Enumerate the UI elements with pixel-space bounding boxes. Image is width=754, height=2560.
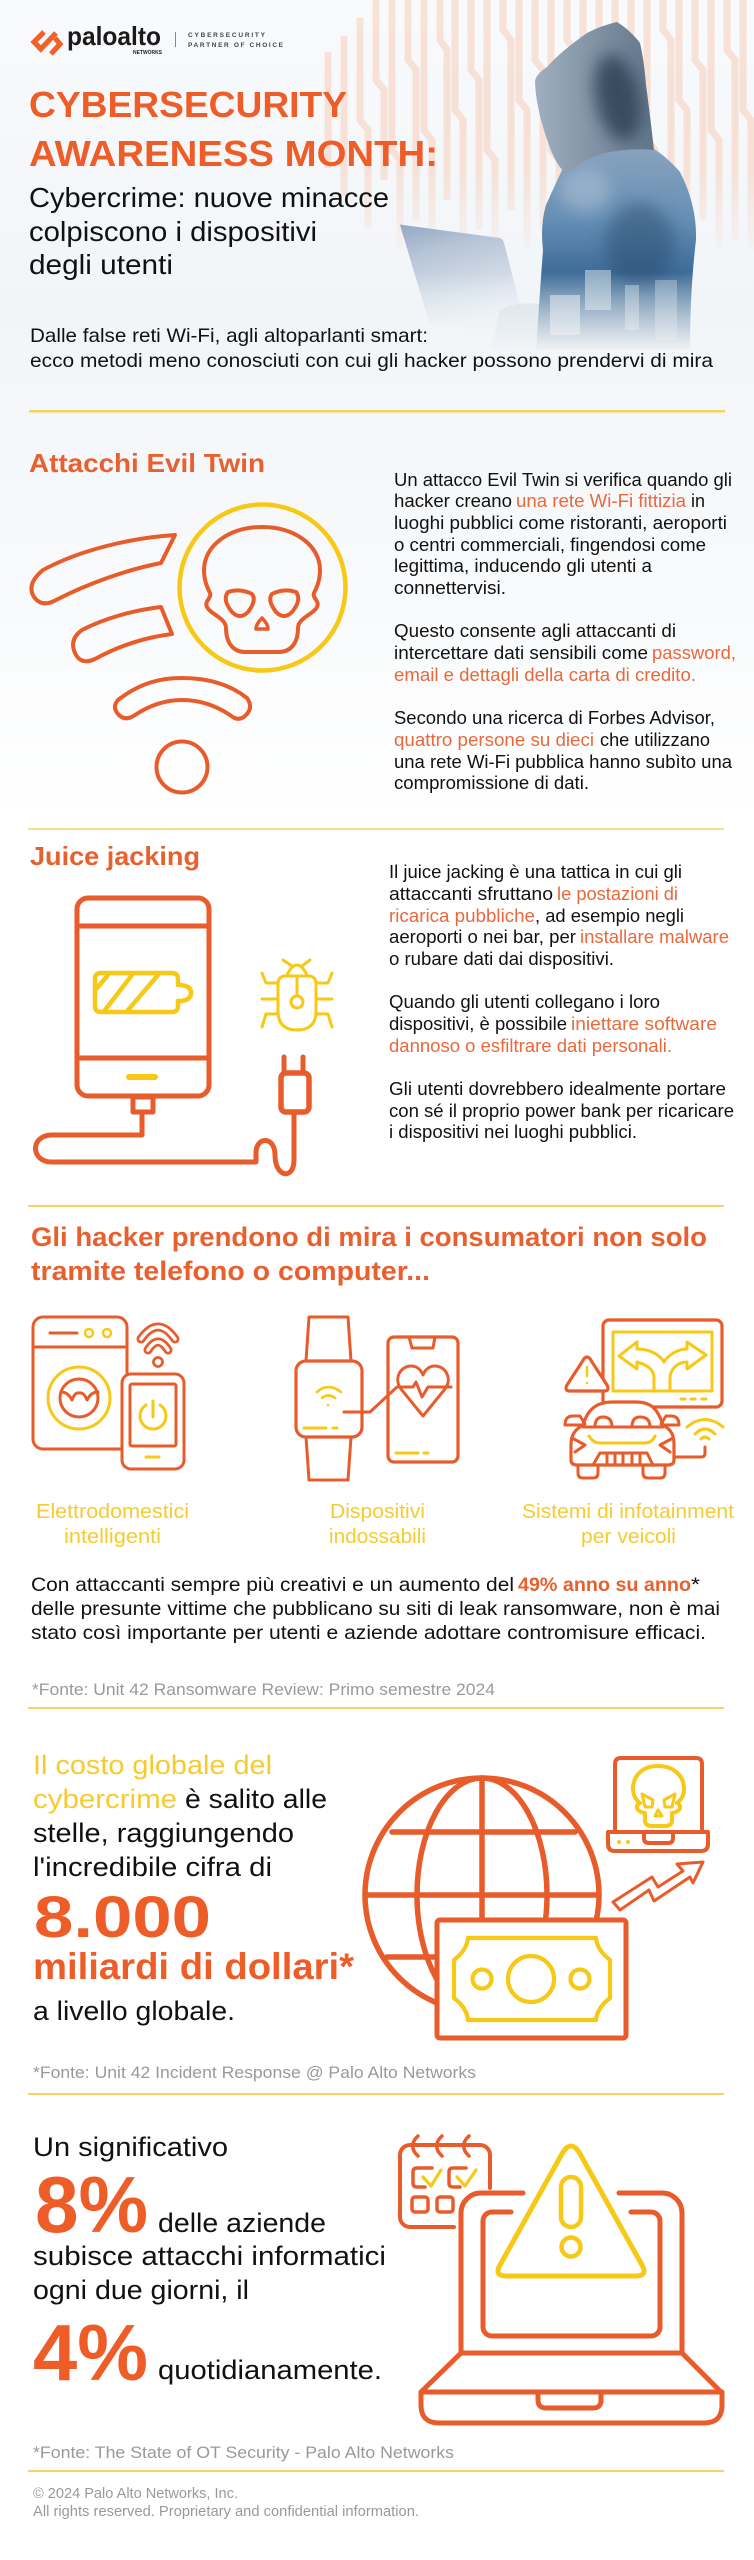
heading: Juice jacking: Juice jacking bbox=[30, 841, 200, 871]
text: Evil Twin explanation: compromissione di dati. bbox=[394, 773, 589, 793]
text: Juice jacking explanation: dannoso o esfiltrare dati personali. bbox=[389, 1036, 672, 1056]
footer copyright bbox=[33, 2485, 419, 2520]
icon: phone with charger and bug bbox=[36, 898, 332, 1174]
source note: *Fonte: Unit 42 Ransomware Review: Primo semestre 2024 bbox=[32, 1680, 495, 1699]
text: Evil Twin explanation: quattro persone su dieci bbox=[394, 730, 594, 750]
text: Evil Twin explanation: una rete Wi-Fi fittizia bbox=[516, 491, 687, 511]
text: Evil Twin explanation: Questo consente agli attaccanti di bbox=[394, 621, 676, 641]
battery bbox=[95, 973, 191, 1012]
subtitle: Cybercrime: nuove minacce bbox=[29, 182, 389, 213]
labels: device categories: per veicoli bbox=[581, 1526, 676, 1548]
text: Evil Twin explanation: in bbox=[691, 491, 705, 511]
labels: device categories: indossabili bbox=[329, 1526, 426, 1548]
footer copyright: All rights reserved. Proprietary and confidential information. bbox=[33, 2503, 419, 2520]
text: global cost of cybercrime bbox=[33, 1750, 355, 2026]
text: Evil Twin explanation: legittima, inducendo gli utenti a bbox=[394, 556, 653, 576]
text: attack frequency statistics: 8% bbox=[35, 2160, 148, 2249]
text: Juice jacking explanation: Il juice jacking è una tattica in cui gli bbox=[389, 862, 682, 882]
labels: device categories: Elettrodomestici bbox=[36, 1501, 189, 1523]
text: Evil Twin explanation: una rete Wi-Fi pubblica hanno subìto una bbox=[394, 752, 733, 772]
text: ransomware increase: stato così importante per utenti e aziende adottare contromisure efficaci. bbox=[31, 1622, 706, 1644]
text: Evil Twin explanation: luoghi pubblici come ristoranti, aeroporti bbox=[394, 513, 727, 533]
text: ransomware increase: delle presunte vittime che pubblicano su siti di leak ransomware, non è mai bbox=[31, 1598, 720, 1620]
intro text: ecco metodi meno conosciuti con cui gli hacker possono prendervi di mira bbox=[30, 350, 713, 372]
logo: Palo Alto Networks: NETWORKS bbox=[133, 50, 162, 56]
text: attack frequency statistics: 4% bbox=[33, 2308, 148, 2397]
text: global cost of cybercrime: a livello globale. bbox=[33, 1996, 235, 2026]
text: global cost of cybercrime: è salito alle bbox=[185, 1784, 327, 1814]
heading: consumer targets bbox=[31, 1222, 707, 1286]
text: ransomware increase: * bbox=[691, 1574, 700, 1596]
text: Juice jacking explanation: attaccanti sfruttano bbox=[389, 884, 553, 904]
labels: device categories: intelligenti bbox=[64, 1526, 161, 1548]
footer copyright: © 2024 Palo Alto Networks, Inc. bbox=[33, 2485, 238, 2502]
icon: laptop with warning and calendar bbox=[400, 2136, 722, 2423]
text: Juice jacking explanation: i dispositivi nei luoghi pubblici. bbox=[389, 1122, 637, 1142]
text: Juice jacking explanation: o rubare dati dai dispositivi. bbox=[389, 949, 614, 969]
logo: Palo Alto Networks: CYBERSECURITY bbox=[188, 32, 266, 39]
source note: *Fonte: Unit 42 Incident Response @ Palo Alto Networks bbox=[33, 2063, 476, 2082]
icon: vehicle infotainment bbox=[565, 1320, 723, 1478]
subtitle: colpiscono i dispositivi bbox=[29, 216, 317, 247]
text: attack frequency statistics: subisce attacchi informatici bbox=[33, 2241, 386, 2271]
text: Juice jacking explanation: , ad esempio negli bbox=[535, 906, 684, 926]
icon: wifi with skull bbox=[31, 504, 345, 792]
text: Juice jacking explanation: Quando gli utenti collegano i loro bbox=[389, 992, 660, 1012]
icon: smart appliances bbox=[33, 1317, 184, 1469]
hood bbox=[535, 22, 654, 173]
text: Evil Twin explanation: Un attacco Evil Twin si verifica quando gli bbox=[394, 470, 732, 490]
text: Juice jacking explanation: dispositivi, è possibile bbox=[389, 1014, 567, 1034]
heading: consumer targets: Gli hacker prendono di mira i consumatori non solo bbox=[31, 1222, 707, 1252]
icon: globe, banknote, laptop skull bbox=[365, 1758, 708, 2038]
text: attack frequency statistics: quotidianamente. bbox=[158, 2355, 382, 2385]
text: Juice jacking explanation: ricarica pubbliche bbox=[389, 906, 535, 926]
bug bbox=[262, 960, 332, 1030]
text: Juice jacking explanation: installare malware bbox=[580, 927, 729, 947]
text: Juice jacking explanation: le postazioni di bbox=[557, 884, 678, 904]
title: AWARENESS MONTH: bbox=[29, 133, 438, 174]
logo: Palo Alto Networks bbox=[34, 21, 284, 56]
text: attack frequency statistics: Un significativo bbox=[33, 2132, 228, 2162]
text: Evil Twin explanation: hacker creano bbox=[394, 491, 512, 511]
text: global cost of cybercrime: cybercrime bbox=[33, 1784, 177, 1814]
logo: Palo Alto Networks: PARTNER OF CHOICE bbox=[188, 42, 284, 49]
text: attack frequency statistics: ogni due giorni, il bbox=[33, 2275, 249, 2305]
text: attack frequency statistics bbox=[33, 2132, 386, 2397]
labels: device categories: Dispositivi bbox=[330, 1501, 425, 1523]
title bbox=[29, 84, 438, 174]
torso bbox=[536, 149, 696, 348]
text: global cost of cybercrime: l'incredibile cifra di bbox=[33, 1852, 272, 1882]
logo: Palo Alto Networks: paloalto bbox=[67, 21, 161, 51]
text: Evil Twin explanation bbox=[394, 470, 736, 793]
text: Evil Twin explanation: email e dettagli della carta di credito. bbox=[394, 665, 696, 685]
intro text: Dalle false reti Wi-Fi, agli altoparlanti smart: bbox=[30, 325, 428, 347]
text: Evil Twin explanation: Secondo una ricerca di Forbes Advisor, bbox=[394, 708, 715, 728]
text: Juice jacking explanation: Gli utenti dovrebbero idealmente portare bbox=[389, 1079, 726, 1099]
heading: consumer targets: tramite telefono o computer... bbox=[31, 1256, 430, 1286]
text: attack frequency statistics: delle aziende bbox=[158, 2208, 326, 2238]
text: global cost of cybercrime: Il costo globale del bbox=[33, 1750, 272, 1780]
labels: device categories: Sistemi di infotainment bbox=[522, 1501, 734, 1523]
subtitle bbox=[29, 182, 389, 280]
text: Juice jacking explanation: con sé il proprio power bank per ricaricare bbox=[389, 1101, 734, 1121]
text: Juice jacking explanation: iniettare software bbox=[571, 1014, 717, 1034]
text: Evil Twin explanation: o centri commerciali, fingendosi come bbox=[394, 535, 706, 555]
source note: *Fonte: The State of OT Security - Palo Alto Networks bbox=[33, 2443, 454, 2462]
text: ransomware increase bbox=[31, 1574, 720, 1644]
hero background stripes bbox=[328, 0, 751, 260]
subtitle: degli utenti bbox=[29, 249, 173, 280]
text: ransomware increase: Con attaccanti sempre più creativi e un aumento del bbox=[31, 1574, 514, 1596]
labels: device categories bbox=[36, 1501, 734, 1548]
text: ransomware increase: 49% anno su anno bbox=[518, 1574, 691, 1596]
logo mark bbox=[34, 32, 60, 54]
text: global cost of cybercrime: miliardi di dollari* bbox=[33, 1946, 355, 1987]
text: Evil Twin explanation: intercettare dati sensibili come bbox=[394, 643, 648, 663]
heading: Attacchi Evil Twin: Attacchi Evil Twin bbox=[29, 448, 265, 478]
text: Evil Twin explanation: password, bbox=[652, 643, 736, 663]
hero image: hooded hacker with laptop bbox=[400, 18, 700, 355]
text: global cost of cybercrime: stelle, raggiungendo bbox=[33, 1818, 294, 1848]
laptop bbox=[400, 224, 519, 318]
arm bbox=[495, 304, 539, 332]
text: Juice jacking explanation: aeroporti o nei bar, per bbox=[389, 927, 576, 947]
text: Juice jacking explanation bbox=[389, 862, 734, 1142]
text: Evil Twin explanation: che utilizzano bbox=[600, 730, 710, 750]
text: Evil Twin explanation: connettervisi. bbox=[394, 578, 506, 598]
intro text bbox=[30, 325, 713, 372]
title: CYBERSECURITY bbox=[29, 84, 347, 125]
text: global cost of cybercrime: 8.000 bbox=[34, 1885, 211, 1950]
icon: wearable devices bbox=[296, 1317, 458, 1480]
